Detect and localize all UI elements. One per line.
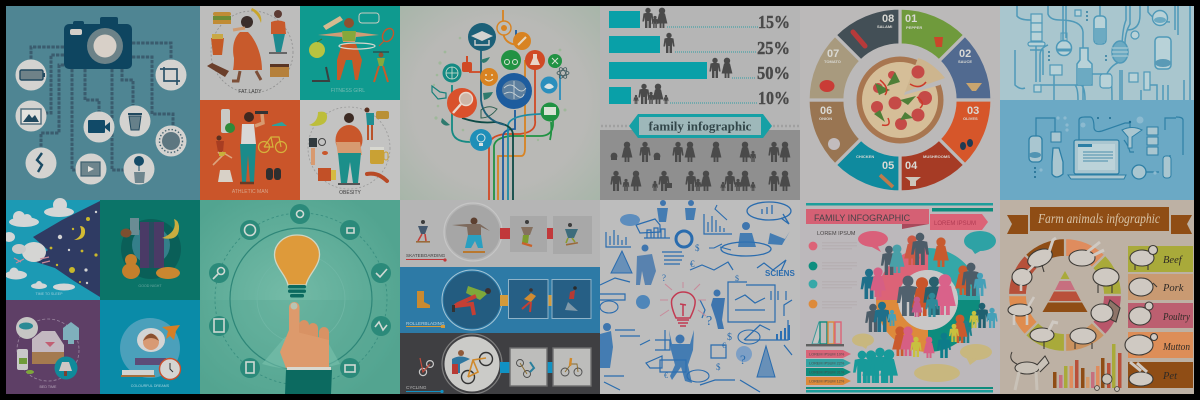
icon: blood pressure xyxy=(309,138,328,165)
connector lines xyxy=(31,43,173,170)
segment labels: 05 xyxy=(882,160,894,172)
icon: leaves xyxy=(441,57,497,126)
panel: bed time xyxy=(6,300,100,394)
icon: racket xyxy=(379,26,396,46)
pipes xyxy=(1036,117,1183,172)
panel: pizza wheel xyxy=(800,6,1000,200)
people xyxy=(600,200,790,383)
center family xyxy=(897,274,956,317)
panel: pizza wheel: SALAMI xyxy=(877,24,892,29)
teal family group xyxy=(853,348,898,383)
step boxes xyxy=(510,216,592,254)
segment labels: 02 xyxy=(959,48,971,60)
category strips: Poultry xyxy=(1162,312,1190,323)
small parts xyxy=(1028,10,1150,92)
icon: jug xyxy=(218,170,233,182)
ribbon title: Farm animals infographic xyxy=(1037,212,1161,227)
text glyphs: € xyxy=(690,259,695,269)
icon: battery xyxy=(20,70,45,80)
caption: FITNESS GIRL xyxy=(331,88,365,94)
animal: sheep xyxy=(1125,334,1158,355)
pyramids xyxy=(611,251,775,377)
category strips: Pork xyxy=(1162,283,1184,294)
category strips: Beef xyxy=(1163,255,1184,266)
text glyphs: ? xyxy=(740,352,746,367)
icon: sausage xyxy=(367,174,387,181)
icon: film xyxy=(81,162,100,176)
step boxes xyxy=(510,348,591,386)
circle: brain xyxy=(496,73,532,109)
text glyphs: $ xyxy=(735,274,739,283)
caption: OBESITY xyxy=(339,190,361,196)
animal: sheep xyxy=(1093,268,1119,293)
sketch charts xyxy=(600,214,792,392)
bar chart xyxy=(1053,344,1122,388)
step figure 2 xyxy=(561,358,582,376)
window and curtains xyxy=(130,218,164,268)
bar sketch xyxy=(776,325,790,340)
caption: BED TIME xyxy=(40,385,57,389)
pie xyxy=(620,214,752,362)
funnel xyxy=(1122,128,1142,148)
panel: pizza wheel: TOMATO xyxy=(824,59,841,64)
ring families xyxy=(861,233,998,358)
person: near board xyxy=(711,290,725,329)
icon: lightning xyxy=(37,153,42,172)
pyramid xyxy=(1042,271,1088,312)
coil xyxy=(1112,41,1128,63)
icon: camera xyxy=(64,17,132,69)
beaker xyxy=(1029,136,1042,162)
legend dots xyxy=(809,242,857,308)
tree branches xyxy=(452,10,560,200)
figure: athletic man xyxy=(240,111,268,183)
panel: rollerblading xyxy=(400,267,600,333)
label xyxy=(406,385,444,393)
text glyphs: $ xyxy=(727,332,732,343)
icon: pills xyxy=(318,168,336,181)
label: ROLLERBLADING xyxy=(406,321,445,326)
title ribbon: LOREM IPSUM xyxy=(934,221,976,227)
panel: obesity xyxy=(300,100,400,200)
flying figure xyxy=(162,325,180,340)
panel: family infographic xyxy=(600,6,800,200)
pajamas xyxy=(63,322,79,344)
icon: cup xyxy=(462,56,472,72)
banner: family infographic xyxy=(649,118,752,134)
light bulb sketch xyxy=(660,282,706,326)
panel: pizza wheel: CHICKEN xyxy=(856,154,874,159)
cube: top left xyxy=(1031,14,1042,41)
figure: obese man xyxy=(336,113,362,185)
segment labels: 03 xyxy=(967,105,979,117)
animal: rabbit xyxy=(1069,242,1104,266)
animal: horse xyxy=(1008,297,1034,325)
wheel xyxy=(1008,238,1122,352)
animal: hen xyxy=(1129,302,1153,325)
text glyphs: $ xyxy=(716,362,721,372)
circle: smiley xyxy=(480,68,498,86)
ribbon title xyxy=(1007,207,1192,234)
test tube xyxy=(1163,156,1171,178)
connector xyxy=(500,295,553,306)
connector xyxy=(500,362,553,373)
animal: turkey xyxy=(1091,300,1120,322)
animal: chicks xyxy=(1095,374,1119,391)
icon: fries xyxy=(211,34,224,55)
night wedge xyxy=(33,201,100,297)
icon: cake xyxy=(270,64,289,77)
icon badges xyxy=(209,204,391,378)
label: CYCLING xyxy=(406,385,427,390)
circle: earth xyxy=(497,21,511,35)
cloud sketch xyxy=(600,205,760,382)
panel: farm animals xyxy=(1000,200,1194,394)
pill bottle xyxy=(17,349,34,374)
caption: ATHLETIC MAN xyxy=(232,189,269,195)
light cone xyxy=(262,337,340,370)
moon and stars xyxy=(50,211,98,284)
panel: good night xyxy=(100,200,200,300)
caption: FAT LADY xyxy=(238,89,262,95)
icon: video camera xyxy=(88,120,110,133)
panel: sleep sky xyxy=(3,198,100,300)
title ribbon xyxy=(806,209,988,230)
flask: round xyxy=(1056,33,1072,56)
person: under bulb xyxy=(669,330,694,383)
panel: camera icons xyxy=(6,6,200,200)
icon: boxing gloves xyxy=(266,168,281,180)
icon: water clip xyxy=(359,13,379,23)
panel: tree of ideas xyxy=(400,6,600,200)
figure: fat lady xyxy=(232,16,262,81)
bar chart: family percentages xyxy=(609,8,790,108)
category strips xyxy=(1128,246,1193,388)
icon circles xyxy=(16,60,186,184)
icon: trash can xyxy=(128,113,142,130)
icon: roller boot xyxy=(417,291,430,308)
panel: pizza wheel: SAUCE xyxy=(958,59,972,64)
bar chart: family percentages: 50% xyxy=(757,63,790,83)
decorative dots xyxy=(433,37,566,141)
icon: sneaker xyxy=(272,122,287,126)
panel: fat lady xyxy=(200,6,300,100)
caption: GOOD NIGHT xyxy=(138,284,162,288)
segment labels: 04 xyxy=(905,160,918,172)
figure: small lifter xyxy=(373,52,389,82)
animal: pig xyxy=(1129,278,1157,296)
laptop xyxy=(1068,140,1126,179)
round flask xyxy=(1132,165,1146,179)
icon: apple xyxy=(309,39,325,58)
text glyphs: SCIENS xyxy=(765,269,795,278)
connector xyxy=(500,228,553,239)
round vessel xyxy=(1152,10,1168,26)
panel: colourful dreams xyxy=(100,300,200,394)
circle: magnifier xyxy=(447,88,477,118)
speech bubbles xyxy=(852,231,996,382)
step figure 1 xyxy=(522,288,536,312)
icon: gear xyxy=(160,130,182,152)
category strips: Pet xyxy=(1162,371,1178,382)
step figure 1 xyxy=(516,360,534,378)
mask bubble xyxy=(16,317,38,339)
animal: rabbit xyxy=(1129,362,1153,386)
cylinder: tall xyxy=(1094,16,1106,44)
banner xyxy=(629,114,772,138)
text glyphs xyxy=(662,243,795,380)
animal: duck xyxy=(1030,322,1058,349)
pipes xyxy=(1015,6,1190,100)
icon: image xyxy=(21,109,41,124)
wheel segments xyxy=(808,8,992,192)
caption: COLOURFUL DREAMS xyxy=(131,384,170,388)
label: SKATEBOARDING xyxy=(406,253,446,258)
icon: stomach xyxy=(309,112,327,126)
teddy bear xyxy=(122,254,140,279)
category strips: Mutton xyxy=(1162,342,1190,353)
moon xyxy=(162,219,179,239)
sheep xyxy=(12,242,50,263)
segment labels: 01 xyxy=(905,13,917,25)
icon: banana xyxy=(251,8,261,23)
arrow stats: LOREM IPSUM 31% xyxy=(809,370,845,374)
step figure 2 xyxy=(565,223,578,246)
faint nodes xyxy=(1039,116,1157,175)
icon: hand pointer xyxy=(432,86,446,99)
icon: burger xyxy=(213,12,231,24)
people: sofa xyxy=(721,222,790,256)
icon: treadmill xyxy=(312,67,329,81)
panel: chemistry laptop xyxy=(1000,100,1194,200)
person: top center xyxy=(657,200,696,222)
step figure 2 xyxy=(565,286,578,311)
panel: pizza wheel: MUSHROOMS xyxy=(923,154,950,159)
figure: runner xyxy=(213,136,232,165)
circle: monitor xyxy=(540,102,560,122)
arrow stats xyxy=(806,350,851,385)
speech bubble xyxy=(747,202,791,224)
circle: graduation cap xyxy=(468,23,496,51)
panel: pizza wheel: ONION xyxy=(819,116,832,121)
bed xyxy=(121,370,155,377)
text glyphs: € xyxy=(722,341,726,350)
beaker xyxy=(1155,37,1171,69)
circle: pencil xyxy=(513,32,531,50)
text glyphs: ? xyxy=(706,314,712,329)
circle: light bulb xyxy=(470,129,492,151)
segment labels: 08 xyxy=(882,13,894,25)
caption: TIME TO SLEEP xyxy=(35,292,63,296)
arrow stats: LOREM IPSUM 10% xyxy=(809,352,845,356)
step boxes xyxy=(508,280,591,318)
panel: chemistry lines top xyxy=(1000,6,1194,100)
text glyphs: ? xyxy=(662,273,666,283)
circle: bicycle xyxy=(501,50,521,70)
panel: pizza wheel: PEPPER xyxy=(906,25,922,30)
animal: rooster xyxy=(1012,265,1034,291)
arrow stats: LOREM IPSUM 12% xyxy=(809,380,845,384)
person: left bottom xyxy=(600,323,613,368)
bed xyxy=(32,331,64,364)
figure: man with burger xyxy=(364,108,389,140)
flask xyxy=(1051,132,1063,177)
ingredient icons xyxy=(820,32,982,187)
figure: hula hoop girl xyxy=(318,18,379,80)
cubes xyxy=(1147,127,1158,155)
panel: pizza wheel: OLIVES xyxy=(963,116,978,121)
panel: business sketch xyxy=(600,200,800,394)
big circle xyxy=(442,270,502,330)
dotted divider xyxy=(601,125,800,127)
icon: small bike xyxy=(419,358,433,376)
wheel animals xyxy=(1008,238,1120,349)
dots xyxy=(1034,117,1131,178)
strip animals xyxy=(1125,246,1158,386)
donut xyxy=(887,259,969,341)
icon: atom xyxy=(557,67,569,79)
panel: cycling xyxy=(400,333,600,394)
pointing hand xyxy=(280,302,331,370)
circle: scissors xyxy=(548,54,562,68)
clock xyxy=(160,358,180,380)
icon: flower pot xyxy=(134,156,145,183)
icon: towel xyxy=(323,16,343,30)
figure: slim lady xyxy=(269,10,287,54)
icon: thermos xyxy=(221,109,235,133)
panel: fitness girl xyxy=(300,6,400,100)
circle: seedling xyxy=(540,76,558,94)
arrow stats: LOREM IPSUM 22% xyxy=(809,362,845,366)
label xyxy=(406,253,447,262)
lamp xyxy=(54,356,78,380)
bar chart: family percentages: 10% xyxy=(758,88,790,108)
pizza xyxy=(856,55,946,144)
dog xyxy=(1011,352,1049,390)
segment labels xyxy=(820,13,979,172)
bar chart: family percentages: 25% xyxy=(757,38,790,58)
segment labels: 06 xyxy=(820,105,832,117)
animal: goose xyxy=(1025,238,1056,272)
icon: bicycle xyxy=(258,137,286,152)
step figure 1 xyxy=(521,220,533,246)
text glyphs: $ xyxy=(695,243,700,253)
bar chart: family percentages: 15% xyxy=(758,12,790,32)
binders xyxy=(806,322,844,346)
small skater xyxy=(416,220,430,243)
icon: beer xyxy=(370,147,388,164)
panel: skateboarding xyxy=(400,200,600,267)
top stripes xyxy=(806,203,993,392)
animal: cow xyxy=(1130,246,1158,270)
sleeping cat xyxy=(156,267,180,279)
text glyphs: € xyxy=(664,371,668,380)
panel: family people donut xyxy=(800,200,1000,394)
sleeve xyxy=(285,370,332,394)
big circle xyxy=(444,203,502,261)
dots xyxy=(1048,11,1107,61)
flask: conical xyxy=(1077,48,1092,85)
icon: crop xyxy=(160,67,180,85)
animal: cow xyxy=(1070,328,1096,349)
clouds xyxy=(3,198,75,290)
macaron xyxy=(120,228,132,238)
person: top-left xyxy=(636,244,656,285)
rings xyxy=(215,213,387,385)
circle: globe xyxy=(442,64,462,82)
icon: chocolate xyxy=(207,63,229,77)
subtitle: LOREM IPSUM xyxy=(817,231,856,237)
light bulb xyxy=(275,235,319,298)
panel: idea bulb xyxy=(200,200,400,394)
title ribbon: FAMILY INFOGRAPHIC xyxy=(814,213,911,223)
segment labels: 07 xyxy=(827,48,839,60)
pictogram rows xyxy=(610,142,790,191)
panel: athletic man xyxy=(200,100,300,200)
girl in bed xyxy=(135,328,168,365)
big circle xyxy=(442,334,502,394)
circle: flask xyxy=(525,50,545,70)
